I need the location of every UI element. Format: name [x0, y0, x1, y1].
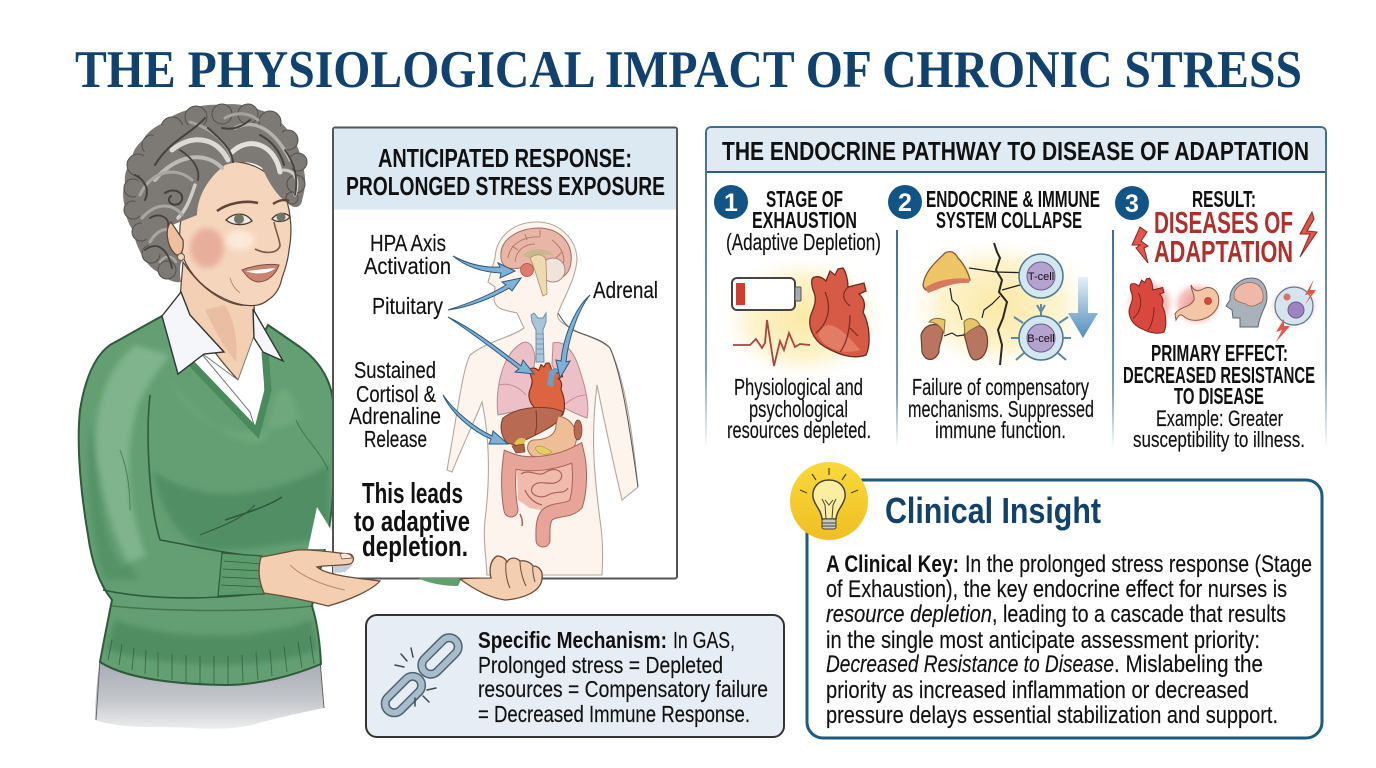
- board heading: [346, 143, 665, 201]
- hair outer curls: [124, 104, 307, 279]
- mechanism text: [478, 627, 768, 727]
- primary effect text: [1123, 340, 1315, 452]
- liver: [501, 407, 563, 445]
- icon: ecg line: [733, 320, 810, 366]
- clinical insight text: , leading to a cascade that results: [992, 601, 1286, 628]
- step 2 description: mechanisms. Suppressed: [908, 396, 1094, 422]
- step 1 heading: EXHAUSTION: [752, 207, 857, 233]
- step 2 heading: [926, 186, 1100, 233]
- cheek blush: [190, 228, 224, 268]
- colon: [509, 453, 580, 540]
- icon: T-cell: [1019, 254, 1063, 298]
- collar right: [253, 309, 283, 361]
- step 1 heading: STAGE OF: [766, 186, 843, 212]
- left hand: [259, 550, 380, 606]
- step 2 heading: ENDOCRINE & IMMUNE: [926, 186, 1100, 212]
- step 2 description: immune function.: [935, 417, 1066, 443]
- skirt: [95, 658, 324, 729]
- mechanism text: = Decreased Immune Response.: [478, 701, 750, 727]
- clinical insight text: in the single most anticipate assessment priority:: [826, 627, 1260, 654]
- labels: HPA Axis: [370, 230, 446, 256]
- icon: anatomical heart: [810, 268, 869, 357]
- step 1 heading: (Adaptive Depletion): [726, 229, 881, 255]
- number badge 2: [888, 185, 922, 219]
- icon: down arrow: [1068, 277, 1098, 338]
- step 1 heading: [726, 186, 881, 255]
- primary effect text: Example: Greater: [1156, 406, 1283, 431]
- step 1 description: resources depleted.: [727, 417, 871, 443]
- icon: light bulb: [790, 462, 868, 540]
- panel: endocrine pathway: [706, 127, 1326, 452]
- clinical insight text: pressure delays essential stabilization and support.: [826, 702, 1278, 729]
- diseases of adaptation heading: DISEASES OF: [1154, 205, 1293, 240]
- step 2 description: Failure of compensatory: [912, 374, 1089, 400]
- anatomy figure: [447, 222, 638, 575]
- lungs: [497, 342, 538, 415]
- diseases of adaptation heading: [1154, 205, 1293, 269]
- number badge 2: 2: [898, 189, 912, 217]
- clinical insight text: . Mislabeling the: [1114, 651, 1263, 678]
- head icon: [1226, 278, 1267, 327]
- panel: anticipated response board: [333, 128, 677, 578]
- gap between arm and board: [308, 507, 333, 549]
- hands holding board: [259, 550, 542, 606]
- icon: B-cell: B-cell: [1027, 333, 1055, 345]
- labels: [349, 230, 658, 452]
- heart organ: [529, 363, 564, 416]
- labels: Pituitary: [372, 293, 443, 319]
- board heading: ANTICIPATED RESPONSE:: [378, 143, 632, 173]
- diseases of adaptation heading: ADAPTATION: [1154, 234, 1293, 269]
- icon: lightning left: [1132, 227, 1148, 263]
- number badge 3: 3: [1125, 190, 1139, 218]
- icon: cracked glands and kidneys: [921, 252, 1000, 360]
- clinical insight text: Decreased Resistance to Disease: [826, 651, 1114, 678]
- body outline: [447, 222, 638, 575]
- clinical insight heading: Clinical Insight: [885, 490, 1101, 531]
- board conclusion text: [354, 478, 470, 563]
- icon: B-cell: [1011, 304, 1071, 360]
- neck: [180, 262, 256, 380]
- panel: clinical insight: [790, 462, 1322, 738]
- step 2: [888, 185, 1100, 443]
- labels: Adrenal: [593, 277, 658, 303]
- face: [180, 162, 291, 306]
- mechanism text: In GAS,: [673, 627, 735, 653]
- clinical insight text: priority as increased inflammation or decreased: [826, 677, 1249, 704]
- sleeve cuff: [218, 553, 264, 596]
- clinical insight text: A Clinical Key:: [826, 551, 959, 578]
- ear and earring: [167, 222, 183, 255]
- step 3: [1115, 186, 1320, 452]
- icon: broken chain: [381, 634, 462, 717]
- mechanism text: Prolonged stress = Depleted: [478, 652, 723, 678]
- labels: Release: [364, 426, 427, 452]
- shadow under thumb: [333, 560, 353, 573]
- panel frame: [706, 127, 1326, 450]
- number badge 1: [714, 185, 748, 219]
- primary effect text: susceptibility to illness.: [1133, 427, 1305, 452]
- board conclusion text: This leads: [362, 478, 463, 510]
- primary effect text: TO DISEASE: [1174, 383, 1264, 409]
- collar left: [162, 292, 224, 374]
- disease icons row: [1123, 277, 1320, 342]
- panel header: [707, 128, 1325, 172]
- board conclusion text: depletion.: [362, 531, 468, 563]
- stomach: [528, 416, 576, 458]
- labels: Activation: [364, 253, 451, 279]
- number badge 1: 1: [724, 189, 738, 217]
- step 1 description: Physiological and: [734, 374, 863, 400]
- panel: specific mechanism: [366, 615, 784, 737]
- result label: RESULT:: [1192, 186, 1256, 212]
- icon: low battery: [732, 278, 801, 310]
- hair strands: [135, 114, 297, 268]
- right hand: [460, 556, 542, 600]
- step 2 description: [908, 374, 1094, 443]
- brain: [501, 228, 571, 280]
- sweater v neck band: [190, 352, 268, 432]
- icon: lightning right: [1300, 212, 1317, 257]
- number badge 3: [1115, 186, 1149, 220]
- trachea: [531, 313, 546, 362]
- sleeve under board: [418, 578, 462, 586]
- primary effect text: PRIMARY EFFECT:: [1151, 340, 1288, 366]
- board conclusion text: to adaptive: [354, 506, 470, 538]
- icon: T-cell: T-cell: [1028, 271, 1054, 283]
- board header band: [334, 128, 676, 210]
- labels: Cortisol &: [356, 381, 436, 407]
- sleeve fold lines: [103, 395, 328, 610]
- step 1 description: psychological: [749, 396, 848, 422]
- hem ribbing: [108, 636, 314, 684]
- small intestine: [517, 463, 572, 510]
- mechanism text: Specific Mechanism:: [478, 627, 667, 653]
- labels: Sustained: [354, 357, 436, 383]
- clinical insight text: [826, 551, 1312, 729]
- labels: Adrenaline: [349, 403, 441, 429]
- pointer arrows: [443, 256, 590, 444]
- clinical insight text: resource depletion: [826, 601, 992, 628]
- step 1 description: [727, 374, 871, 443]
- sweater shading: [88, 345, 330, 665]
- illustration: presenter woman body: [79, 104, 333, 729]
- shirt: [200, 336, 265, 434]
- sweater: [79, 316, 333, 685]
- brows, eyes, nose, mouth: [217, 200, 290, 293]
- step 2 heading: SYSTEM COLLAPSE: [936, 207, 1082, 233]
- mechanism text: resources = Compensatory failure: [478, 676, 768, 702]
- step 1: [714, 185, 891, 443]
- board heading: PROLONGED STRESS EXPOSURE: [346, 171, 665, 201]
- icon: crack: [994, 243, 1007, 365]
- hair: [123, 104, 307, 282]
